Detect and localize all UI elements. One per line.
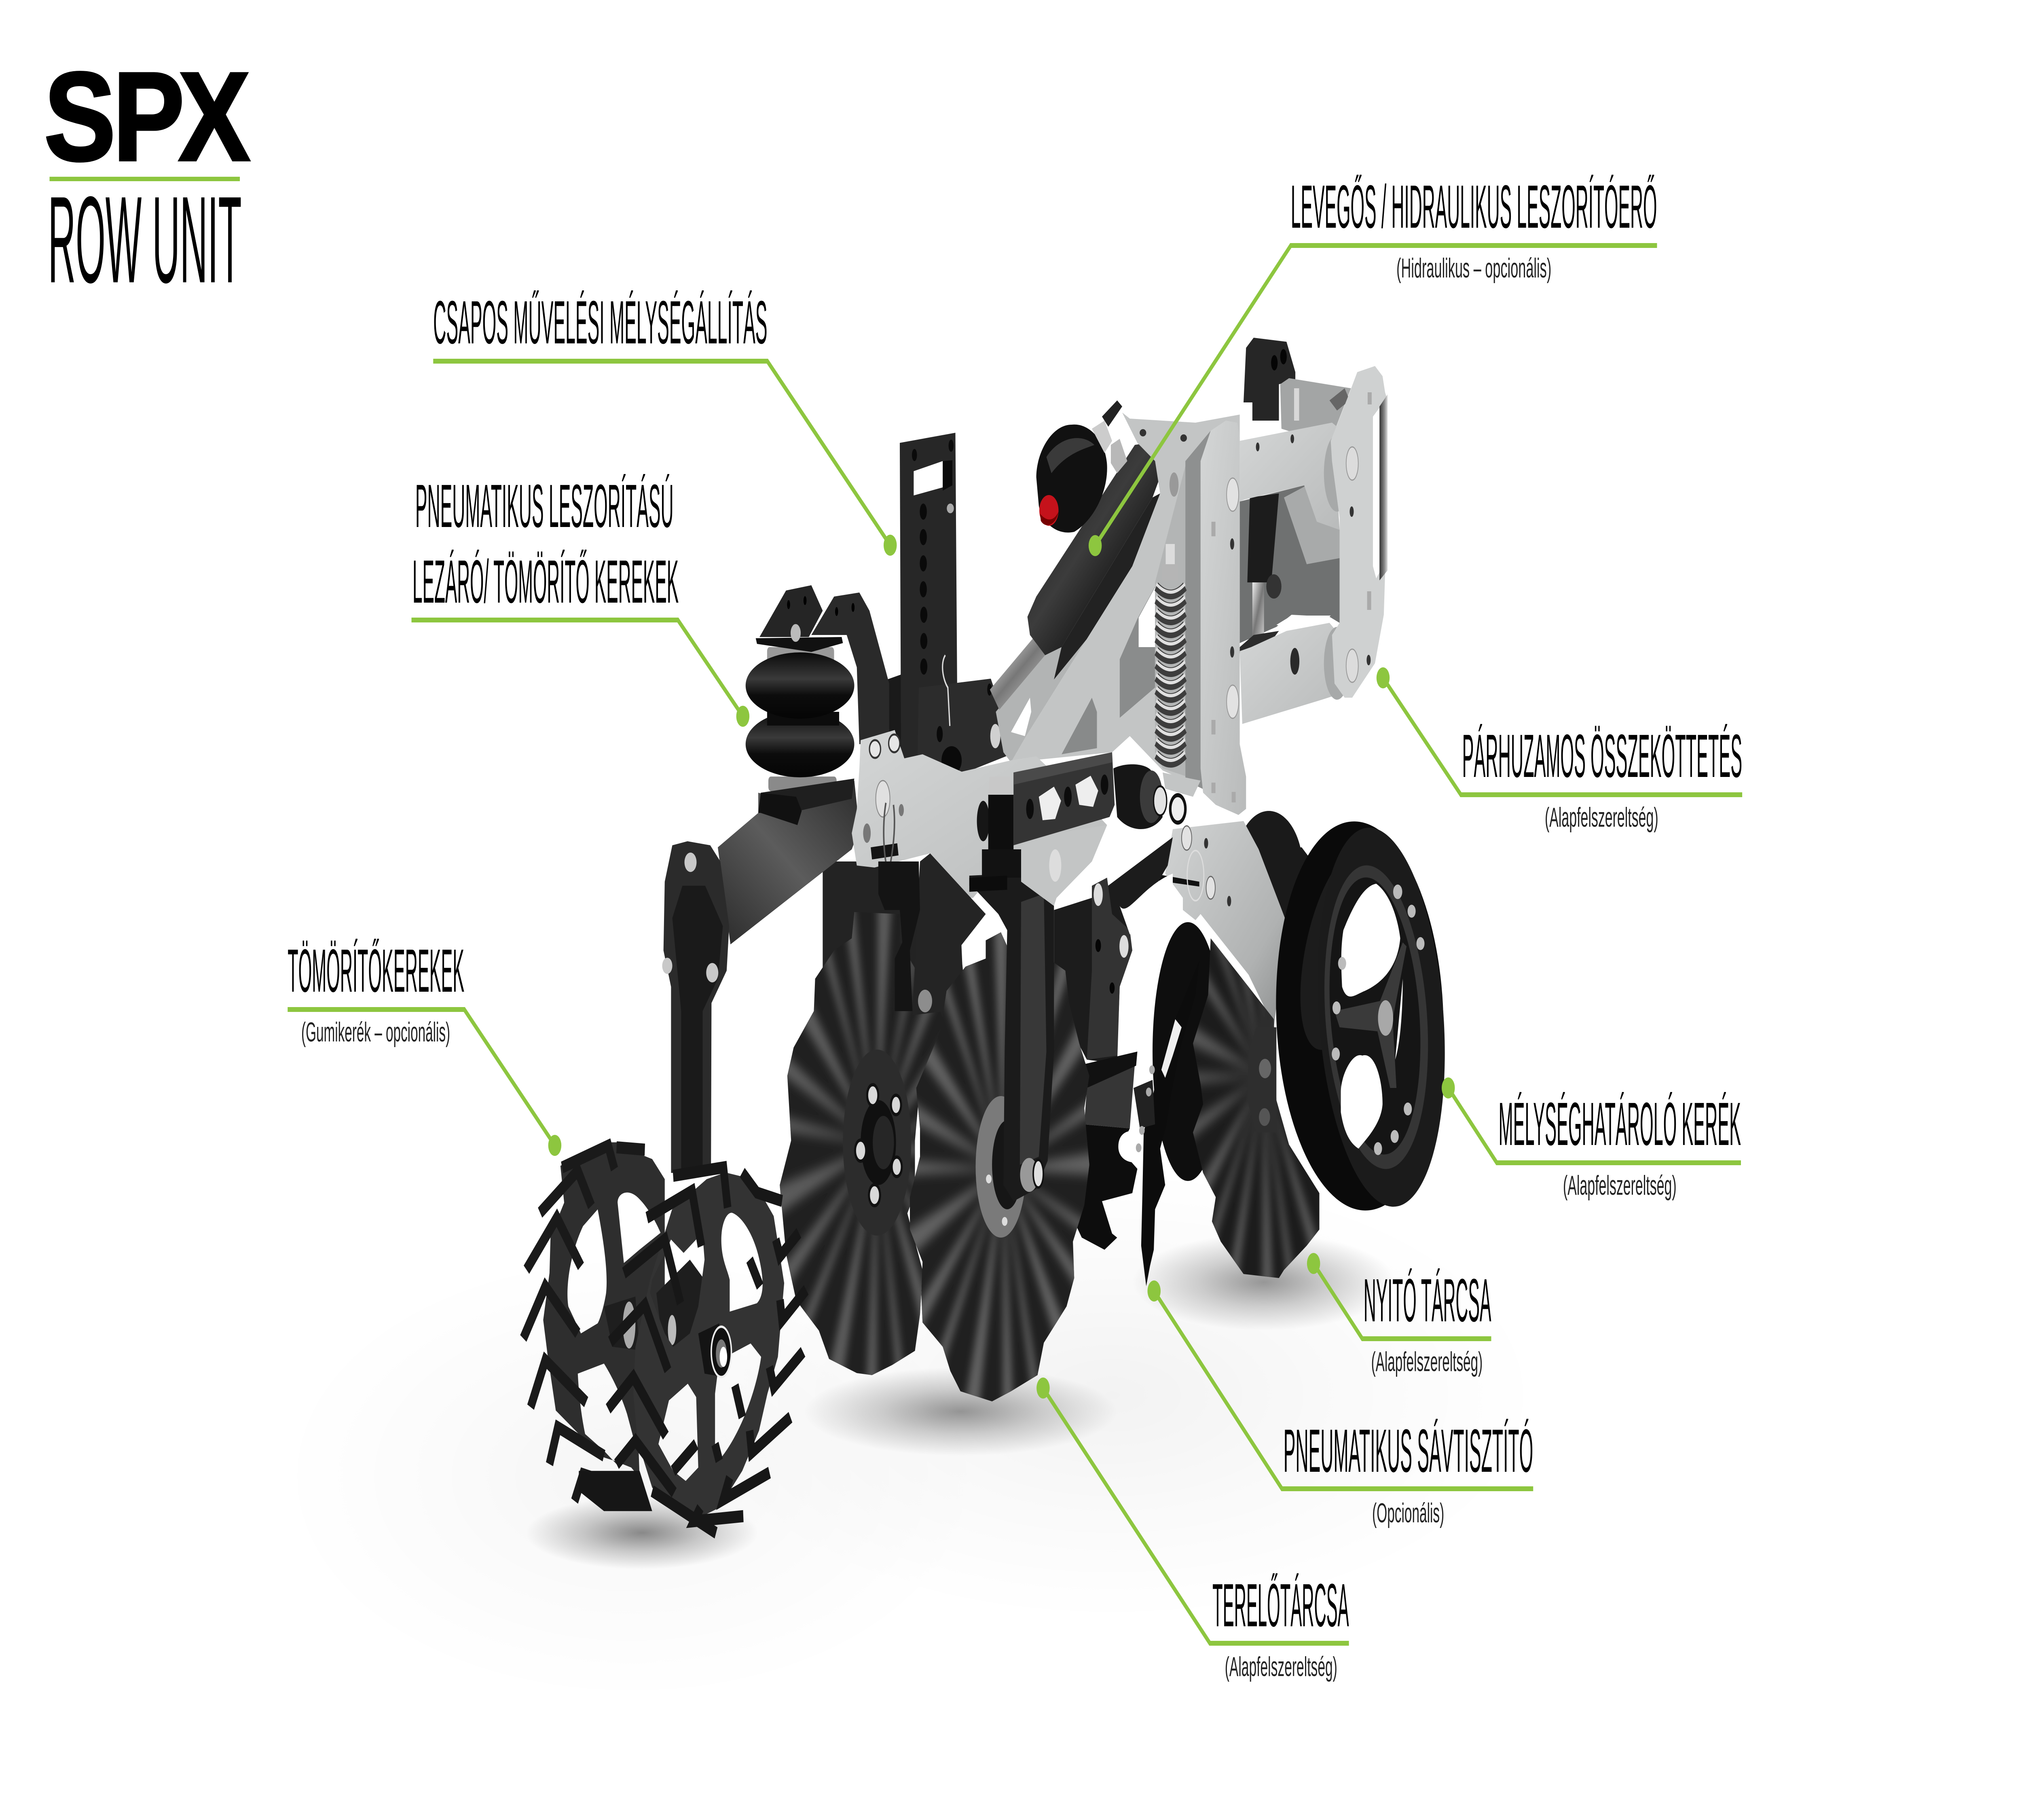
- middle hanger bracket: [878, 853, 986, 1015]
- logo: SPX ROW UNIT: ROW UNIT: [48, 171, 242, 309]
- third disc and cleaner arm: [1069, 1052, 1140, 1250]
- right end plate with handle: [1331, 366, 1387, 698]
- text: PNEUMATIKUS SÁVTISZTÍTÓ: [1284, 1416, 1533, 1485]
- callout: TERELŐTÁRCSA: (Alapfelszereltség): [1225, 1652, 1337, 1682]
- center gray plate: [852, 730, 1107, 898]
- callout: PÁRHUZAMOS ÖSSZEKÖTTETÉS: [1377, 667, 1742, 833]
- parallel linkage inner mechanism: [1240, 485, 1339, 653]
- triangular main frame plate: [1011, 413, 1240, 793]
- callout: LEVEGŐS / HIDRAULIKUS LESZORÍTÓERŐ: [1089, 172, 1657, 556]
- opening disc right: [1193, 938, 1319, 1278]
- logo: SPX ROW UNIT: [44, 47, 251, 309]
- callout: PÁRHUZAMOS ÖSSZEKÖTTETÉS: (Alapfelszereltség): [1545, 802, 1658, 833]
- parallel linkage arms: [1240, 423, 1350, 724]
- air spring assembly: [746, 585, 889, 791]
- upright adjustment bar: [900, 433, 1016, 775]
- rear arm and leg: [662, 779, 859, 1173]
- callout: TERELŐTÁRCSA: [1036, 1378, 1349, 1682]
- callout: CSAPOS MŰVELÉSI MÉLYSÉGÁLLÍTÁS: [433, 288, 897, 556]
- lower right gray plate: [1142, 821, 1309, 1027]
- callout: PNEUMATIKUS SÁVTISZTÍTÓ: (Opcionális): [1372, 1498, 1444, 1529]
- callout: PNEUMATIKUS LESZORÍTÁSÚ LEZÁRÓ/ TÖMÖRÍTŐ KEREKEK: [412, 472, 749, 727]
- callout: PNEUMATIKUS LESZORÍTÁSÚ LEZÁRÓ/ TÖMÖRÍTŐ KEREKEK: LEZÁRÓ/ TÖMÖRÍTŐ KEREKEK: [412, 547, 679, 616]
- text: NYITÓ TÁRCSA: [1364, 1266, 1491, 1334]
- callout: NYITÓ TÁRCSA: (Alapfelszereltség): [1371, 1347, 1483, 1378]
- machine: row unit illustration: [523, 338, 1459, 1533]
- logo wordmark SPX: SPX: [44, 47, 251, 187]
- callout: TÖMÖRÍTŐKEREKEK: (Gumikerék – opcionális): [301, 1017, 450, 1048]
- callout: NYITÓ TÁRCSA: [1307, 1253, 1491, 1378]
- disc shank: [969, 870, 1054, 1201]
- rear dark support block: [823, 671, 966, 1052]
- text: TERELŐTÁRCSA: [1212, 1571, 1349, 1639]
- disc rear: coulter: [780, 912, 934, 1375]
- gauge wheel: [1266, 810, 1459, 1222]
- front packer wheel: [608, 1168, 806, 1533]
- front packer wheel hub: [698, 1323, 732, 1377]
- callout: PNEUMATIKUS LESZORÍTÁSÚ LEZÁRÓ/ TÖMÖRÍTŐ KEREKEK: PNEUMATIKUS LESZORÍTÁSÚ: [415, 472, 674, 540]
- ground shadow: [278, 1169, 1542, 1703]
- hydraulic accumulator: [1036, 400, 1127, 533]
- callout: LEVEGŐS / HIDRAULIKUS LESZORÍTÓERŐ: (Hidraulikus – opcionális): [1396, 253, 1551, 284]
- callout: MÉLYSÉGHATÁROLÓ KERÉK: (Alapfelszereltség): [1563, 1170, 1677, 1201]
- rear packer wheel: [523, 1142, 665, 1511]
- suspension coil spring: [1156, 544, 1201, 797]
- adjustment bar and knuckle: [969, 752, 1185, 906]
- text: MÉLYSÉGHATÁROLÓ KERÉK: [1499, 1090, 1741, 1158]
- title rule: [49, 177, 240, 181]
- dark lower linkage: [1054, 837, 1173, 1064]
- disc front: deflector: [907, 926, 1094, 1412]
- row cleaner disc: [1134, 961, 1199, 1286]
- back frame plate and top block: [1244, 338, 1351, 433]
- pneumatic cylinder: [994, 443, 1165, 762]
- callout: MÉLYSÉGHATÁROLÓ KERÉK: [1442, 1077, 1741, 1201]
- back gauge wheel and back disc: [1153, 811, 1303, 1181]
- main vertical plate: [1201, 421, 1246, 815]
- callout: TÖMÖRÍTŐKEREKEK: TÖMÖRÍTŐKEREKEK: [288, 936, 464, 1005]
- callout: TÖMÖRÍTŐKEREKEK: [288, 936, 561, 1156]
- gauge wheel openings: [1341, 884, 1403, 1149]
- callout: CSAPOS MŰVELÉSI MÉLYSÉGÁLLÍTÁS: CSAPOS MŰVELÉSI MÉLYSÉGÁLLÍTÁS: [433, 288, 768, 356]
- callout: PNEUMATIKUS SÁVTISZTÍTÓ: [1148, 1280, 1533, 1529]
